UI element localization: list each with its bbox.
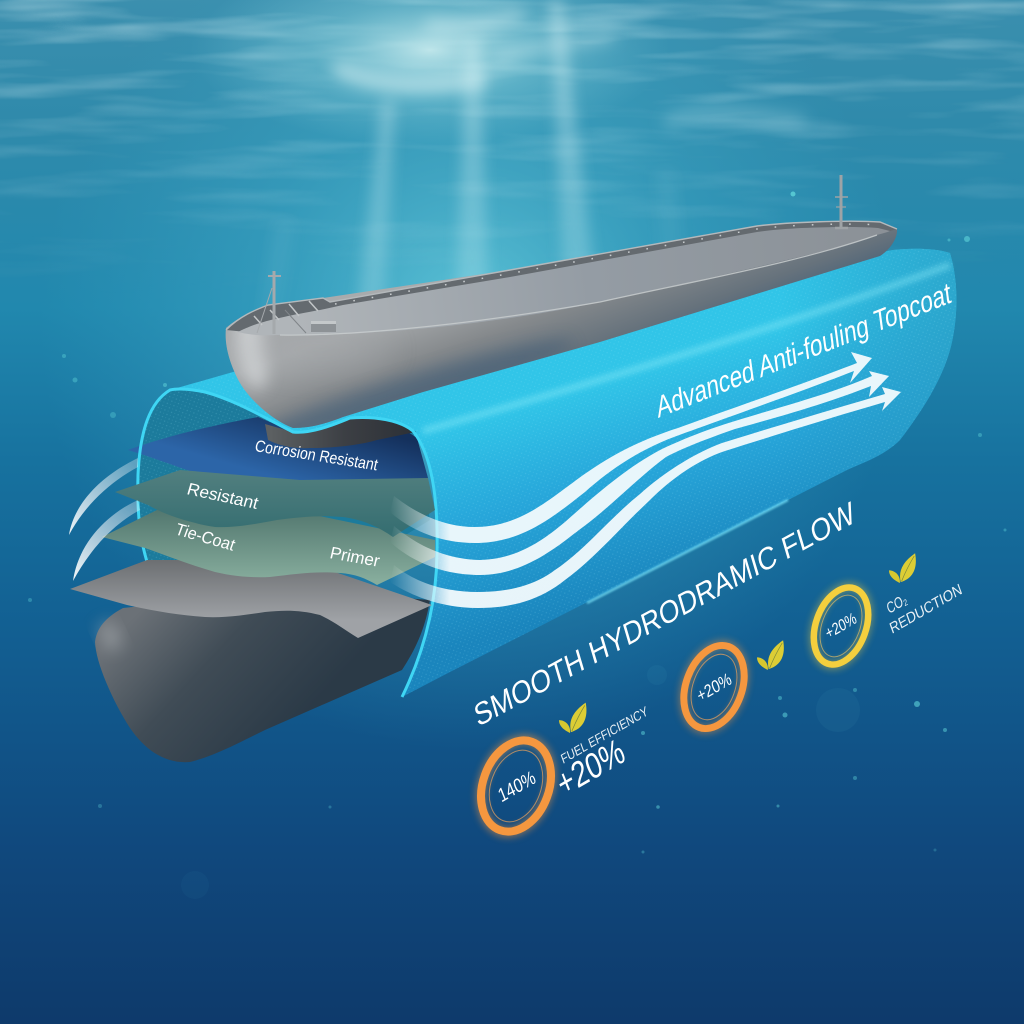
- heading: smooth hydrodynamic flow: SMOOTH HYDRODRAMIC FLOW: [471, 496, 859, 734]
- ship: [226, 175, 898, 428]
- icon: leaf CO2: [889, 553, 916, 583]
- wisps: flow lines entering from the left: [69, 458, 140, 581]
- ring value: 140%: [495, 767, 539, 807]
- stat: middle ring: [673, 636, 755, 738]
- heading: advanced anti-fouling topcoat: Advanced Anti-fouling Topcoat: [655, 276, 953, 425]
- layer: resistant sheet: [115, 470, 435, 537]
- bow mast: [257, 271, 306, 334]
- ring value: +20%: [694, 669, 734, 706]
- deck edge highlight: [280, 235, 877, 335]
- deck house: [311, 321, 336, 332]
- label: reduction: REDUCTION: [888, 581, 964, 638]
- label: fuel efficiency: FUEL EFFICIENCY: [559, 703, 650, 767]
- layer: tie-coat sheet: [102, 510, 435, 585]
- ship rail and struts: [226, 221, 897, 330]
- arrows: hydrodynamic flow streams: [390, 352, 901, 608]
- icon: leaf middle: [757, 640, 784, 670]
- label: resistant: Resistant: [185, 480, 261, 513]
- layer: corrosion resistant coat: [128, 417, 428, 497]
- label: primer: Primer: [328, 543, 382, 571]
- ship bulwark band: [226, 221, 897, 335]
- water surface light: [0, 0, 1024, 236]
- ship deck: [238, 227, 890, 335]
- stat: CO2 ring: [803, 579, 879, 673]
- panel: topcoat skin wrapped around hull: [170, 249, 956, 697]
- ring value: +20%: [823, 609, 859, 643]
- layer: substrate grey sheet: [70, 560, 432, 638]
- stat: fuel efficiency ring: [469, 730, 563, 842]
- label: CO2: CO₂: [885, 591, 910, 618]
- value: fuel efficiency +20%: +20%: [551, 731, 630, 804]
- stern mast: [835, 175, 848, 228]
- sun rays: [232, 0, 700, 540]
- panel: lower hull section: [95, 590, 430, 762]
- floating particles: [28, 192, 1006, 899]
- ship hull: [226, 229, 898, 428]
- label: corrosion resistant: Corrosion Resistant: [253, 436, 380, 474]
- label: tie-coat: Tie-Coat: [173, 520, 238, 555]
- skin edge highlight: [138, 389, 437, 697]
- panel: inner skin behind the layers: [138, 389, 430, 600]
- icon: leaf fuel efficiency: [559, 703, 586, 733]
- icon: hull keel under the skin: [265, 417, 416, 448]
